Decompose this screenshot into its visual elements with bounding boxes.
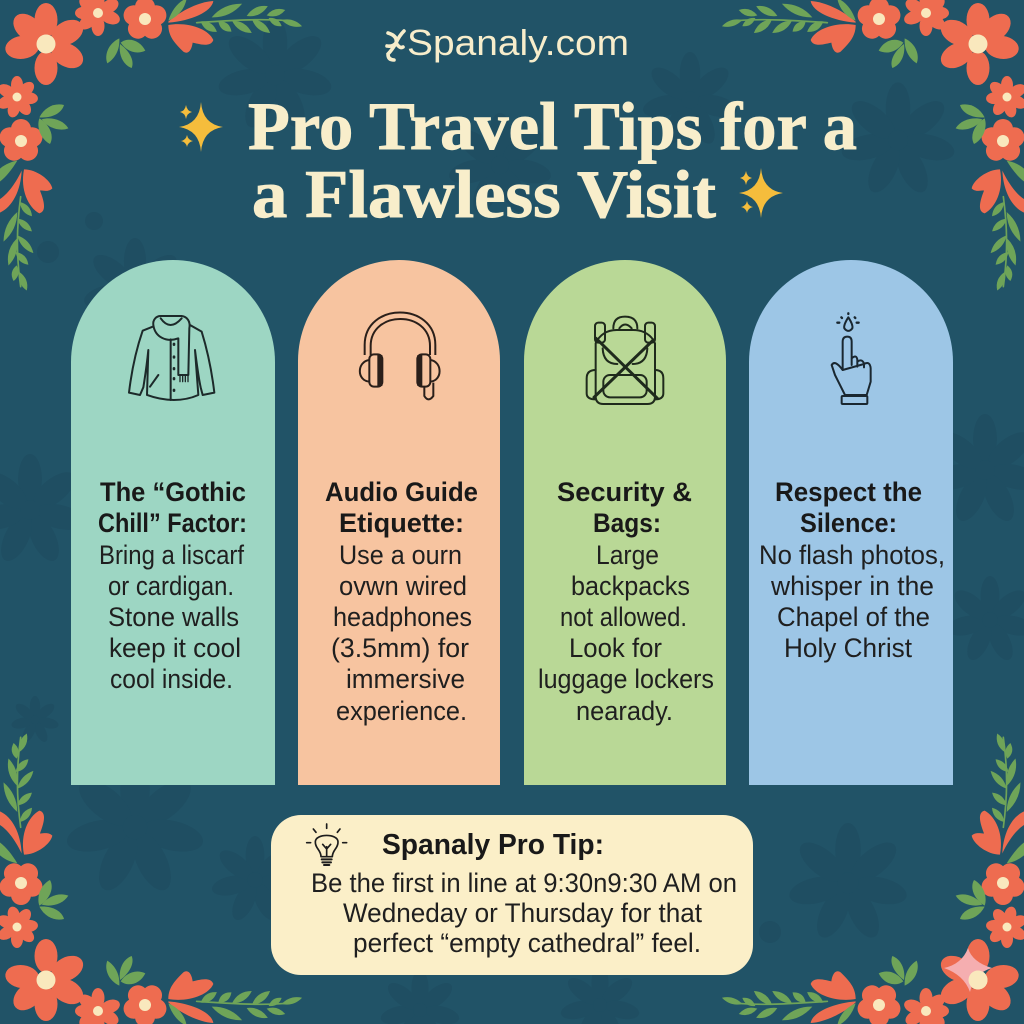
icon: crossed-out backpack [587, 317, 663, 404]
text: pro tip [311, 868, 737, 958]
heading: audio guide: Audio Guide [325, 477, 478, 507]
icon: light bulb [307, 824, 347, 865]
text: security and bags: backpacks [571, 571, 690, 601]
text: security and bags: not allowed. [560, 602, 687, 632]
floral corner: bottom right [721, 732, 1024, 1024]
floral corner: bottom left [0, 732, 303, 1024]
heading: audio guide [325, 477, 478, 538]
floral corner: top right [721, 0, 1024, 292]
icon: sparkle right [739, 168, 783, 218]
heading: security and bags: Bags: [593, 508, 661, 538]
heading: gothic chill: The “Gothic [100, 477, 246, 507]
text: audio guide: immersive [346, 664, 465, 694]
text: gothic chill: cool inside. [110, 664, 233, 694]
heading: gothic chill [98, 477, 247, 538]
panel: respect the silence [749, 260, 953, 785]
icon: headphones [360, 312, 440, 399]
text: pro tip: Wedneday or Thursday for that [343, 898, 703, 928]
heading: security and bags: Security & [557, 477, 692, 507]
heading: pro tip: Spanaly Pro Tip: [382, 829, 604, 861]
text: audio guide [331, 540, 472, 726]
text: audio guide: experience. [336, 696, 467, 726]
icon: jacket with scarf [129, 316, 214, 400]
text: audio guide: Use a ourn [339, 540, 462, 570]
text: security and bags: Look for [569, 633, 662, 663]
text: gothic chill: Bring a liscarf [99, 540, 245, 570]
heading: respect the silence: Silence: [800, 508, 897, 538]
panel: security and bags [524, 260, 726, 785]
icon: logo mark [387, 31, 404, 60]
panel: audio guide [298, 260, 500, 785]
text: gothic chill: Stone walls [108, 602, 239, 632]
text: audio guide: ovwn wired [339, 571, 467, 601]
pale sparkle watermark on bottom-right flower [944, 948, 992, 992]
text: security and bags [538, 540, 714, 726]
text: respect the silence [759, 540, 945, 663]
text: pro tip: Be the first in line at 9:30n9:30 AM on [311, 868, 737, 898]
heading: respect the silence: Respect the [775, 477, 922, 507]
text: audio guide: headphones [333, 602, 472, 632]
text: security and bags: nearady. [576, 696, 673, 726]
text: audio guide: (3.5mm) for [331, 633, 469, 663]
text: gothic chill: or cardigan. [108, 571, 234, 601]
text: security and bags: luggage lockers [538, 664, 714, 694]
icon: sparkle left [179, 102, 223, 152]
text: security and bags: Large [596, 540, 659, 570]
text: gothic chill: keep it cool [109, 633, 241, 663]
logo [387, 22, 629, 63]
title: Pro Travel Tips for a [248, 88, 857, 164]
heading: security and bags [557, 477, 692, 538]
text: gothic chill [99, 540, 245, 694]
panel: gothic chill [71, 260, 275, 785]
heading: audio guide: Etiquette: [339, 508, 464, 538]
title [248, 88, 857, 232]
heading: respect the silence [775, 477, 922, 538]
text: respect the silence: whisper in the [770, 571, 934, 601]
logo text: Spanaly.com [407, 22, 629, 63]
text: respect the silence: Chapel of the [777, 602, 930, 632]
floral corner: top left [0, 0, 303, 292]
text: respect the silence: Holy Christ [784, 633, 913, 663]
icon: pointing hand [832, 313, 871, 404]
title: a Flawless Visit [252, 156, 716, 232]
text: pro tip: perfect “empty cathedral” feel. [353, 928, 701, 958]
text: respect the silence: No flash photos, [759, 540, 945, 570]
heading: gothic chill: Chill” Factor: [98, 508, 247, 538]
callout: pro tip [271, 815, 753, 975]
